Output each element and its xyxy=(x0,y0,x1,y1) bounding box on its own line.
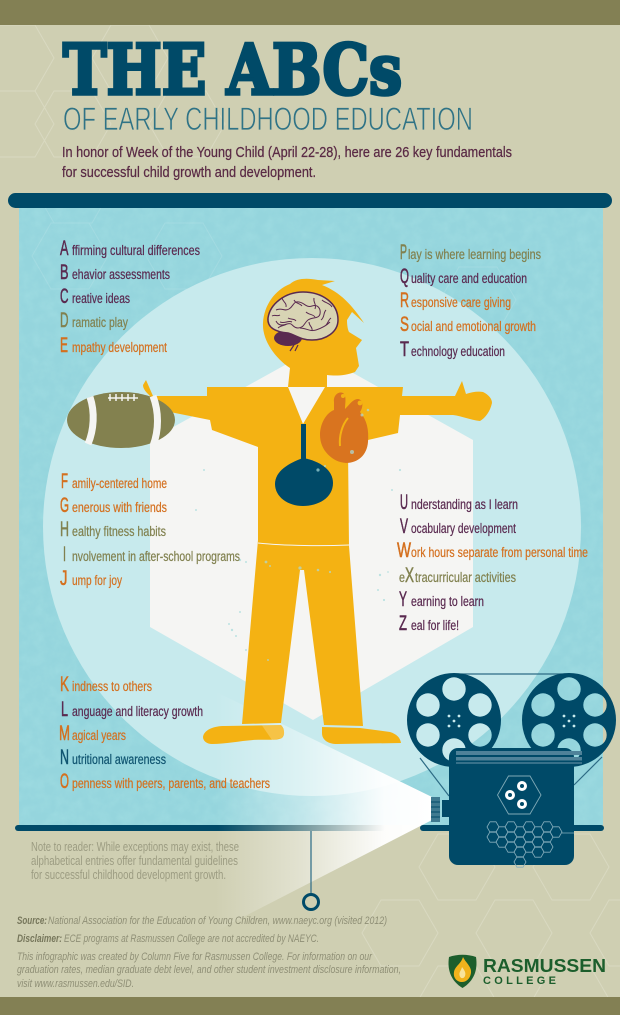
L: anguage and literacy growth xyxy=(72,704,203,719)
Z xyxy=(399,612,459,635)
E xyxy=(60,334,167,357)
K: K xyxy=(60,673,69,696)
W: W xyxy=(397,539,411,562)
H xyxy=(60,518,166,541)
H: H xyxy=(60,518,69,541)
light circle xyxy=(43,258,581,796)
projection screen xyxy=(19,157,603,825)
D: D xyxy=(60,309,68,332)
note to reader: Note to reader: While exceptions may exist, these xyxy=(31,839,239,854)
Q: Q xyxy=(400,265,409,288)
O: O xyxy=(60,770,69,793)
projector light beam xyxy=(130,650,432,937)
A: ffirming cultural differences xyxy=(72,243,200,258)
projector body xyxy=(449,748,574,865)
F: F xyxy=(61,470,68,493)
N: N xyxy=(60,746,69,769)
bottom band xyxy=(0,997,620,1015)
U: U xyxy=(400,491,408,514)
B: ehavior assessments xyxy=(72,267,170,282)
M: agical years xyxy=(72,728,126,743)
credits xyxy=(17,951,401,990)
Z: eal for life! xyxy=(411,618,459,633)
projector lens xyxy=(431,797,450,822)
J xyxy=(60,567,122,590)
P xyxy=(400,241,541,264)
disclaimer xyxy=(17,933,319,945)
head xyxy=(263,279,364,387)
I: I xyxy=(63,543,66,566)
M: M xyxy=(59,722,70,745)
waist line xyxy=(258,543,349,546)
credits: This infographic was created by Column Five for Rasmussen College. For information on our xyxy=(17,951,373,963)
letter list: U to Z xyxy=(397,491,588,635)
Z: Z xyxy=(399,612,407,635)
speckles on body xyxy=(265,409,369,661)
logo wordmark: RASMUSSEN xyxy=(483,956,606,976)
Y: Y xyxy=(399,588,407,611)
letter list: P to T xyxy=(400,241,541,361)
speckles on white hexagon xyxy=(195,469,401,651)
B: B xyxy=(60,261,68,284)
A: A xyxy=(60,237,68,260)
F xyxy=(61,470,167,493)
credits: visit www.rasmussen.edu/SID. xyxy=(17,978,134,990)
T xyxy=(400,338,505,361)
B xyxy=(60,261,170,284)
G: enerous with friends xyxy=(72,500,167,515)
G xyxy=(60,494,167,517)
letter list: A to E xyxy=(60,237,200,357)
U: nderstanding as I learn xyxy=(411,497,518,512)
title xyxy=(63,30,473,137)
M xyxy=(59,722,126,745)
letter list: F to J xyxy=(60,470,240,590)
title main: THE ABCs xyxy=(63,30,402,111)
beam highlight on shoe xyxy=(262,725,285,740)
A xyxy=(60,237,200,260)
screen roller top xyxy=(8,193,612,208)
N xyxy=(60,746,166,769)
letter list: K to O xyxy=(59,673,270,793)
icon: football xyxy=(67,392,175,448)
C xyxy=(60,285,130,308)
body with arms and legs xyxy=(143,380,492,726)
P: lay is where learning begins xyxy=(408,247,541,262)
V xyxy=(400,515,516,538)
Q: uality care and education xyxy=(411,271,527,286)
logo: Rasmussen College xyxy=(449,955,606,988)
disclaimer: ECE programs at Rasmussen College are not accredited by NAEYC. xyxy=(64,933,319,945)
gear hexagon xyxy=(498,776,541,814)
E: E xyxy=(60,334,68,357)
N: utritional awareness xyxy=(72,752,166,767)
note to reader: alphabetical entries offer fundamental guidelines xyxy=(31,853,238,868)
collar xyxy=(288,387,325,424)
white hexagon xyxy=(150,350,473,720)
T: T xyxy=(400,338,409,361)
top band xyxy=(0,0,620,25)
disclaimer: Disclaimer: xyxy=(17,933,62,945)
J: ump for joy xyxy=(72,573,122,588)
H: ealthy fitness habits xyxy=(72,524,166,539)
J: J xyxy=(60,567,68,590)
L xyxy=(61,698,203,721)
icon: stomach tie xyxy=(275,424,333,506)
P: P xyxy=(400,241,407,264)
I: nvolvement in after-school programs xyxy=(72,549,240,564)
D xyxy=(60,309,128,332)
K xyxy=(60,673,152,696)
source and disclaimer xyxy=(17,915,401,990)
T: echnology education xyxy=(411,344,505,359)
R: esponsive care giving xyxy=(411,295,511,310)
E: mpathy development xyxy=(72,340,167,355)
credits: graduation rates, median graduate debt level, and other student investment disclosure information, xyxy=(17,964,401,976)
I xyxy=(63,543,240,566)
film reel right xyxy=(522,673,616,767)
S: ocial and emotional growth xyxy=(411,319,536,334)
title subtitle: OF EARLY CHILDHOOD EDUCATION xyxy=(63,101,473,137)
boy figure xyxy=(143,279,492,744)
logo college: COLLEGE xyxy=(483,975,556,987)
X: X xyxy=(405,564,414,587)
L: L xyxy=(61,698,68,721)
intro text: for successful child growth and development. xyxy=(62,164,316,181)
U xyxy=(400,491,518,514)
icon: brain xyxy=(268,292,338,351)
Y xyxy=(399,588,484,611)
logo shield xyxy=(449,955,476,988)
intro text xyxy=(62,144,512,181)
V: V xyxy=(400,515,408,538)
note to reader xyxy=(31,839,239,882)
K: indness to others xyxy=(72,679,152,694)
O xyxy=(60,770,270,793)
O: penness with peers, parents, and teachers xyxy=(72,776,270,791)
screen pull cord xyxy=(304,831,318,910)
D: ramatic play xyxy=(72,315,128,330)
C: C xyxy=(60,285,68,308)
S: S xyxy=(400,313,409,336)
screen bottom bar xyxy=(15,825,604,831)
shoes xyxy=(203,725,401,744)
S xyxy=(400,313,536,336)
reel connecting belts xyxy=(420,674,602,796)
film reel left xyxy=(407,673,501,767)
X xyxy=(399,564,516,587)
R xyxy=(400,289,511,312)
X: e xyxy=(399,570,405,585)
F: amily-centered home xyxy=(72,476,167,491)
C: reative ideas xyxy=(72,291,130,306)
X: tracurricular activities xyxy=(415,570,516,585)
note to reader: for successful childhood development growth. xyxy=(31,867,226,882)
G: G xyxy=(60,494,69,517)
icon: heart xyxy=(320,392,368,463)
W xyxy=(397,539,588,562)
source: Source: xyxy=(17,915,47,927)
V: ocabulary development xyxy=(411,521,516,536)
projector xyxy=(407,673,616,867)
intro text: In honor of Week of the Young Child (April 22-28), here are 26 key fundamentals xyxy=(62,144,512,161)
honeycomb pattern xyxy=(487,822,574,867)
projector top stripes xyxy=(456,751,582,764)
Y: earning to learn xyxy=(411,594,484,609)
R: R xyxy=(400,289,409,312)
Q xyxy=(400,265,527,288)
source: National Association for the Education of Young Children, www.naeyc.org (visited 2012) xyxy=(48,915,387,927)
